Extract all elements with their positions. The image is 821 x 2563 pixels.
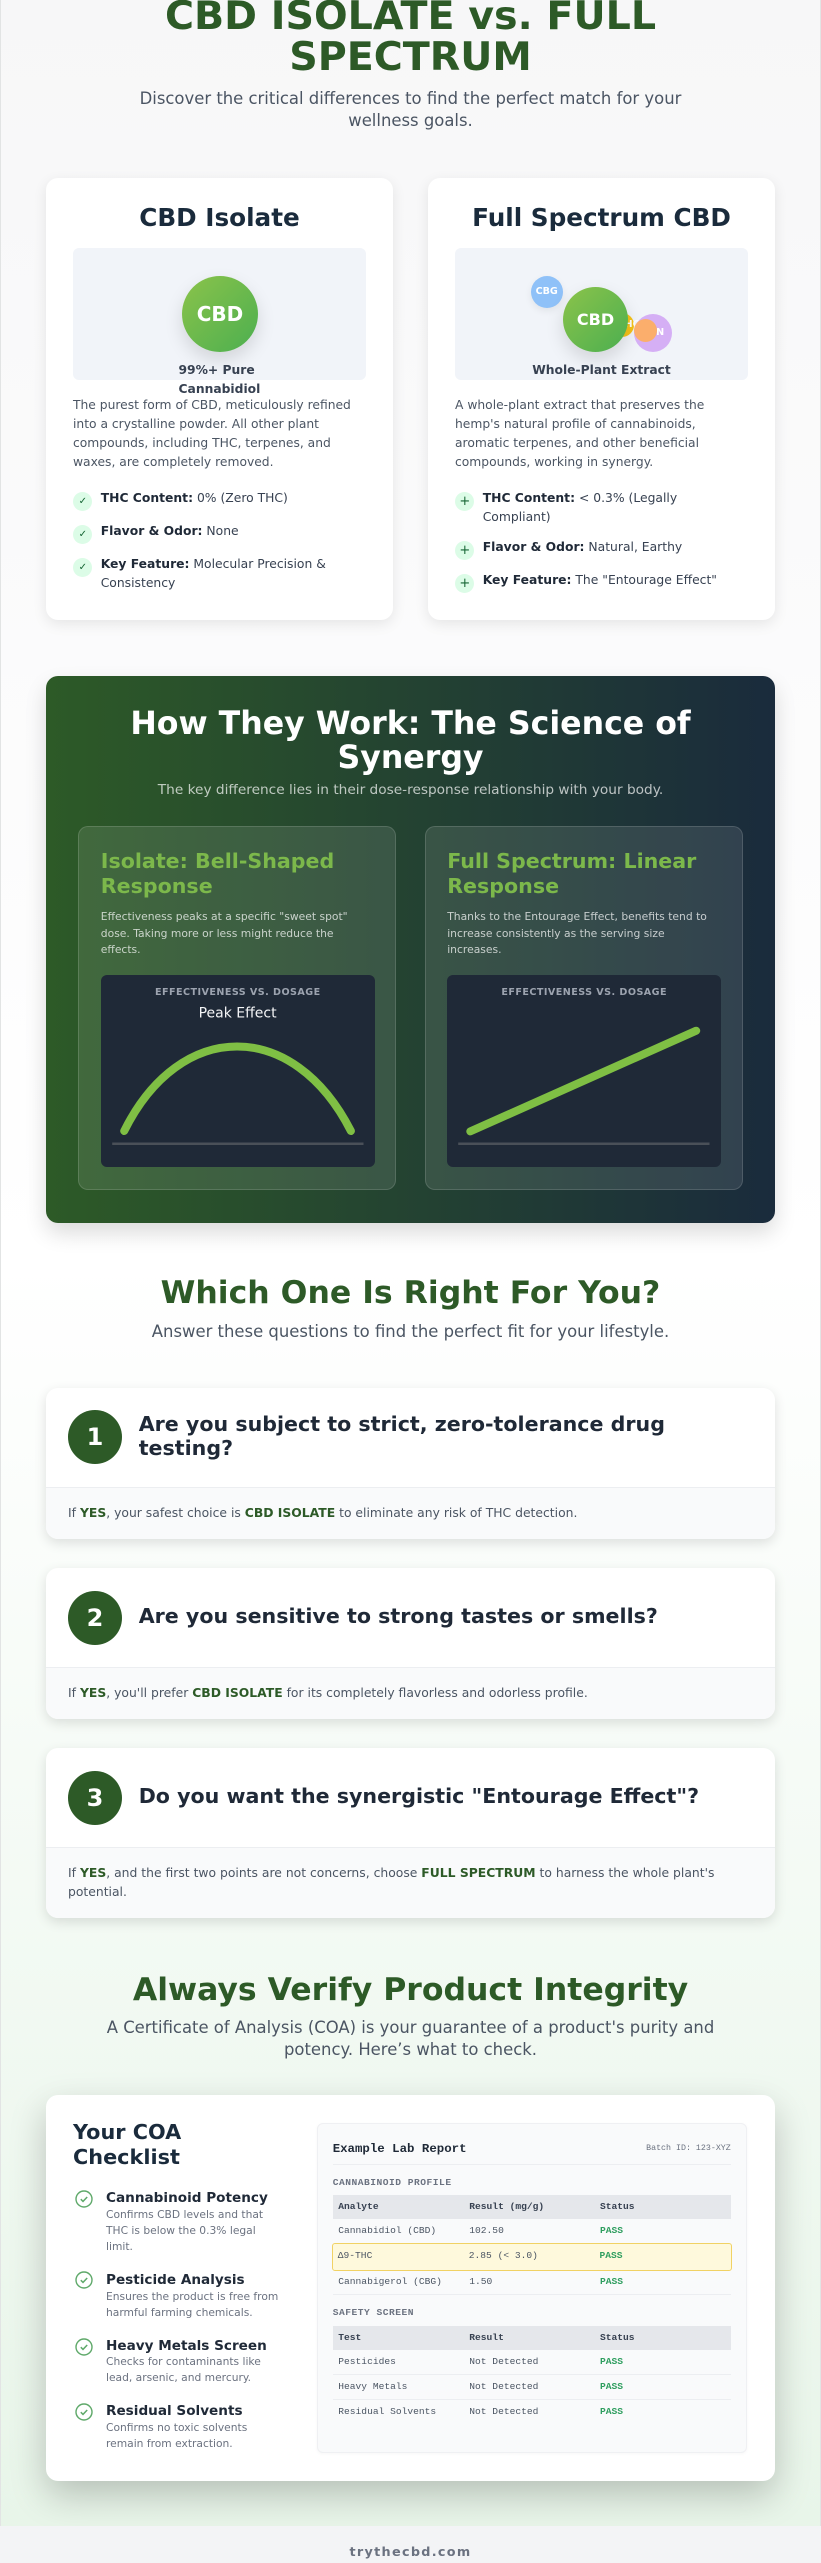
- number badge: 3: [87, 1784, 103, 1812]
- question card 1: [46, 1388, 775, 1539]
- heading: linear response: Response: [447, 874, 559, 898]
- description text: into a crystalline powder. All other plant: [73, 417, 319, 431]
- result: Not Detected: [469, 2406, 538, 2417]
- item: heavy metals screen: Heavy Metals Screen: [106, 2338, 267, 2354]
- feature list: [455, 491, 717, 593]
- number badge: [68, 1590, 122, 1644]
- description: increases.: [447, 943, 502, 956]
- heading: CBD Isolate: CBD Isolate: [139, 202, 300, 232]
- heading: linear response: [447, 849, 696, 898]
- description: increase consistently as the serving size: [447, 927, 665, 940]
- status: PASS: [600, 2225, 623, 2236]
- icon: CBD circle: [182, 276, 258, 352]
- subheading: potency. Here’s what to check.: [284, 2040, 537, 2059]
- feature: THC content: THC Content: 0% (Zero THC): [101, 491, 288, 505]
- feature: THC content: THC Content: < 0.3% (Legally: [483, 491, 677, 505]
- heading: which one is right: Which One Is Right For You?: [161, 1275, 660, 1311]
- description: effects.: [101, 943, 141, 956]
- panel: how they work: [46, 676, 775, 1223]
- row: CBG: [333, 2271, 731, 2295]
- panel: COA: [46, 2095, 775, 2480]
- feature: key feature: Key Feature: Molecular Precision &: [101, 557, 326, 571]
- heading: science of synergy: How They Work: The Science of: [130, 706, 691, 742]
- description: dose. Taking more or less might reduce the: [101, 927, 334, 940]
- column: test: Test: [338, 2332, 361, 2343]
- description text: aromatic terpenes, and other beneficial: [455, 436, 699, 450]
- test: Pesticides: [338, 2356, 396, 2367]
- result: Not Detected: [469, 2381, 538, 2392]
- analyte: Δ9-THC: [338, 2250, 372, 2261]
- icon: plus: [455, 541, 474, 560]
- answer text: If YES, your safest choice is CBD ISOLATE to eliminate any risk of THC detection.: [68, 1506, 577, 1520]
- description: [447, 910, 707, 956]
- footer link text: trythecbd.com: [349, 2545, 472, 2560]
- item description: Checks for contaminants like: [106, 2355, 261, 2368]
- test: Residual Solvents: [338, 2406, 436, 2417]
- heading: science of synergy: [130, 706, 691, 776]
- description text: The purest form of CBD, meticulously refined: [73, 398, 351, 412]
- number badge: 1: [87, 1423, 103, 1451]
- curve: [124, 1046, 351, 1131]
- item: cannabinoid potency: Cannabinoid Potency: [106, 2190, 268, 2206]
- row: heavy metals: [333, 2375, 731, 2400]
- chart: linear: [447, 975, 721, 1167]
- description text: compounds, including THC, terpenes, and: [73, 436, 331, 450]
- item description: Ensures the product is free from: [106, 2290, 278, 2302]
- description text: [455, 398, 704, 469]
- checklist heading: Checklist: [73, 2145, 180, 2169]
- title: SPECTRUM: [289, 34, 532, 80]
- row: residual solvents: [338, 2406, 623, 2417]
- icon: plus: +: [459, 576, 470, 591]
- checklist heading: Your COA: [73, 2120, 181, 2144]
- feature: flavor and odor: Flavor & Odor: None: [101, 524, 239, 538]
- icon: check: ✓: [79, 496, 87, 507]
- item description: Confirms CBD levels and that: [106, 2208, 263, 2220]
- chart title: EFFECTIVENESS VS. DOSAGE: [155, 987, 321, 998]
- description text: compounds, working in synergy.: [455, 455, 653, 469]
- answer: [46, 1846, 775, 1918]
- annotation: peak effect: Peak Effect: [198, 1006, 277, 1022]
- subtitle: wellness goals.: [348, 111, 473, 130]
- icon: check: [73, 525, 92, 544]
- status: PASS: [599, 2250, 622, 2261]
- description text: waxes, are completely removed.: [73, 455, 274, 469]
- row: CBD: [338, 2225, 623, 2236]
- title: [165, 0, 656, 80]
- item description: limit.: [106, 2240, 133, 2253]
- answer: [46, 1486, 775, 1539]
- icon: yellow compound circle: [610, 313, 634, 337]
- result: 2.85 (< 3.0): [469, 2250, 538, 2261]
- icon: check circle: [75, 2271, 93, 2289]
- result: 1.50: [469, 2276, 492, 2287]
- item description: Confirms no toxic solvents: [106, 2421, 247, 2434]
- heading: Full Spectrum CBD: Full Spectrum CBD: [472, 202, 731, 232]
- analyte: Cannabigerol (CBG): [338, 2276, 442, 2287]
- item description: harmful farming chemicals.: [106, 2306, 253, 2319]
- result: Not Detected: [469, 2356, 538, 2367]
- item description: THC is below the 0.3% legal: [106, 2224, 256, 2237]
- column: result: Result: [469, 2332, 504, 2343]
- answer: [46, 1666, 775, 1719]
- checklist heading: [72, 2120, 182, 2169]
- answer text: [68, 1866, 714, 1899]
- panel: CBD Isolate: [46, 178, 393, 620]
- status: PASS: [600, 2381, 623, 2392]
- heading: bell-shaped response: [101, 849, 334, 898]
- question text: [138, 1412, 665, 1460]
- question text: Are you sensitive to strong tastes or smells?: [139, 1604, 658, 1628]
- label: 99%+ Pure Cannabidiol: [178, 362, 260, 396]
- item description: lead, arsenic, and mercury.: [106, 2371, 251, 2384]
- subtitle: Discover the critical differences to find the perfect match for your: [140, 89, 681, 108]
- report title: Example Lab Report: [333, 2142, 467, 2156]
- description: [101, 910, 348, 956]
- icon: check: [73, 492, 92, 511]
- number badge: [68, 1410, 122, 1464]
- question card 2: [46, 1568, 775, 1719]
- description text: [72, 398, 351, 469]
- icon: CBD circle: CBD: [197, 302, 243, 326]
- icon: check circle: [75, 2338, 93, 2356]
- icon: CBG circle: [531, 276, 563, 308]
- divider: [333, 2164, 731, 2165]
- icon: check circle: [75, 2190, 93, 2208]
- icon: check: ✓: [79, 562, 87, 573]
- table label: safety screen: SAFETY SCREEN: [333, 2307, 414, 2318]
- illustration: pure CBD molecule: [73, 248, 366, 380]
- icon: check: [73, 558, 92, 577]
- table header: [333, 2195, 731, 2219]
- analyte: Cannabidiol (CBD): [338, 2225, 436, 2236]
- panel: isolate response: [78, 826, 396, 1190]
- icon: plus: +: [459, 494, 470, 509]
- icon: CBD circle: CBD: [577, 310, 614, 329]
- heading: bell-shaped response: Isolate: Bell-Shaped: [101, 849, 334, 873]
- question text: Are you subject to strict, zero-tolerance drug: [139, 1412, 665, 1436]
- chart plot: [112, 1006, 364, 1145]
- column: status: Status: [600, 2332, 635, 2343]
- question text: testing?: [139, 1436, 233, 1460]
- panel: Full Spectrum CBD: [428, 178, 775, 620]
- answer text: If YES, and the first two points are not concerns, choose FULL SPECTRUM to harness the whole plant's: [68, 1866, 714, 1880]
- label: 99%+ Pure Cannabidiol: 99%+ Pure: [178, 362, 255, 376]
- feature: key feature: Key Feature: The "Entourage Effect": [483, 573, 717, 587]
- footer: [0, 2526, 821, 2560]
- line: [470, 1031, 696, 1131]
- description text: A whole-plant extract that preserves the: [455, 398, 704, 412]
- description: Thanks to the Entourage Effect, benefits tend to: [447, 910, 707, 923]
- description text: hemp's natural profile of cannabinoids,: [455, 417, 696, 431]
- icon: plus: [455, 492, 474, 511]
- feature: THC content: Compliant): [483, 510, 551, 524]
- item: pesticide analysis: Pesticide Analysis: [106, 2272, 245, 2288]
- status: PASS: [600, 2406, 623, 2417]
- item description: [106, 2421, 247, 2450]
- heading: science of synergy: Synergy: [337, 740, 484, 776]
- feature: key feature: [101, 557, 326, 590]
- column: analyte: Analyte: [338, 2201, 379, 2212]
- feature: THC content: [482, 491, 677, 524]
- axis: [112, 1142, 363, 1145]
- icon: CBG circle: CBG: [536, 286, 558, 297]
- heading: bell-shaped response: Response: [101, 874, 213, 898]
- batch id: Batch ID: 123-XYZ: [646, 2144, 731, 2153]
- result: 102.50: [469, 2225, 504, 2236]
- icon: CBN circle: CBN: [642, 327, 664, 338]
- axis: [458, 1142, 710, 1145]
- label: Whole-Plant Extract: Whole-Plant Extract: [532, 362, 671, 376]
- question text: Do you want the synergistic "Entourage Effect"?: [139, 1784, 699, 1808]
- table label: cannabinoid profile: CANNABINOID PROFILE: [333, 2177, 452, 2188]
- item description: [106, 2208, 263, 2253]
- item: residual solvents: Residual Solvents: [106, 2403, 243, 2419]
- row: pesticides: [333, 2350, 731, 2375]
- subtitle: [140, 89, 682, 130]
- illustration: whole plant compounds: [455, 248, 748, 380]
- chart plot: [458, 1026, 710, 1145]
- feature: flavor and odor: Flavor & Odor: Natural, Earthy: [483, 540, 682, 554]
- number badge: [68, 1770, 122, 1824]
- chart title: EFFECTIVENESS VS. DOSAGE: [501, 987, 667, 998]
- status: PASS: [600, 2276, 623, 2287]
- subheading: [106, 2018, 714, 2059]
- column: result: Result (mg/g): [469, 2201, 544, 2212]
- answer text: potential.: [68, 1885, 127, 1899]
- row: THC highlighted: [332, 2243, 732, 2271]
- test: Heavy Metals: [338, 2381, 407, 2392]
- icon: plus: +: [459, 543, 470, 558]
- checklist: [72, 2120, 182, 2169]
- icon: orange terpene circle: [634, 319, 657, 342]
- subheading: The key difference lies in their dose-response relationship with your body.: [158, 782, 663, 798]
- chart: bell curve: [101, 975, 375, 1167]
- item description: [106, 2290, 278, 2319]
- icon: CBN circle: [634, 314, 672, 352]
- column: status: Status: [600, 2201, 635, 2212]
- icon: check: ✓: [79, 529, 87, 540]
- icon: plus: [455, 574, 474, 593]
- status: PASS: [600, 2356, 623, 2367]
- label: 99%+ Pure Cannabidiol: Cannabidiol: [178, 382, 260, 396]
- lab report: [317, 2123, 747, 2453]
- subheading: A Certificate of Analysis (COA) is your guarantee of a product's purity and: [107, 2018, 714, 2037]
- feature: key feature: Consistency: [101, 576, 175, 590]
- subheading: Answer these questions to find the perfect fit for your lifestyle.: [152, 1322, 669, 1341]
- item description: [106, 2355, 261, 2384]
- answer text: If YES, you'll prefer CBD ISOLATE for its completely flavorless and odorless profile.: [68, 1686, 588, 1700]
- table header: [333, 2326, 731, 2350]
- feature list: [73, 491, 326, 590]
- icon: yellow compound circle: THC: [618, 319, 640, 330]
- heading: linear response: Full Spectrum: Linear: [447, 849, 696, 873]
- number badge: 2: [87, 1604, 103, 1632]
- heading: verify integrity: Always Verify Product Integrity: [133, 1972, 688, 2008]
- description: Effectiveness peaks at a specific "sweet spot": [101, 910, 348, 923]
- panel: full spectrum response: [425, 826, 743, 1190]
- question card 3: [46, 1748, 775, 1918]
- item description: remain from extraction.: [106, 2437, 233, 2450]
- icon: CBD circle: [563, 287, 628, 352]
- icon: check circle: [75, 2403, 93, 2421]
